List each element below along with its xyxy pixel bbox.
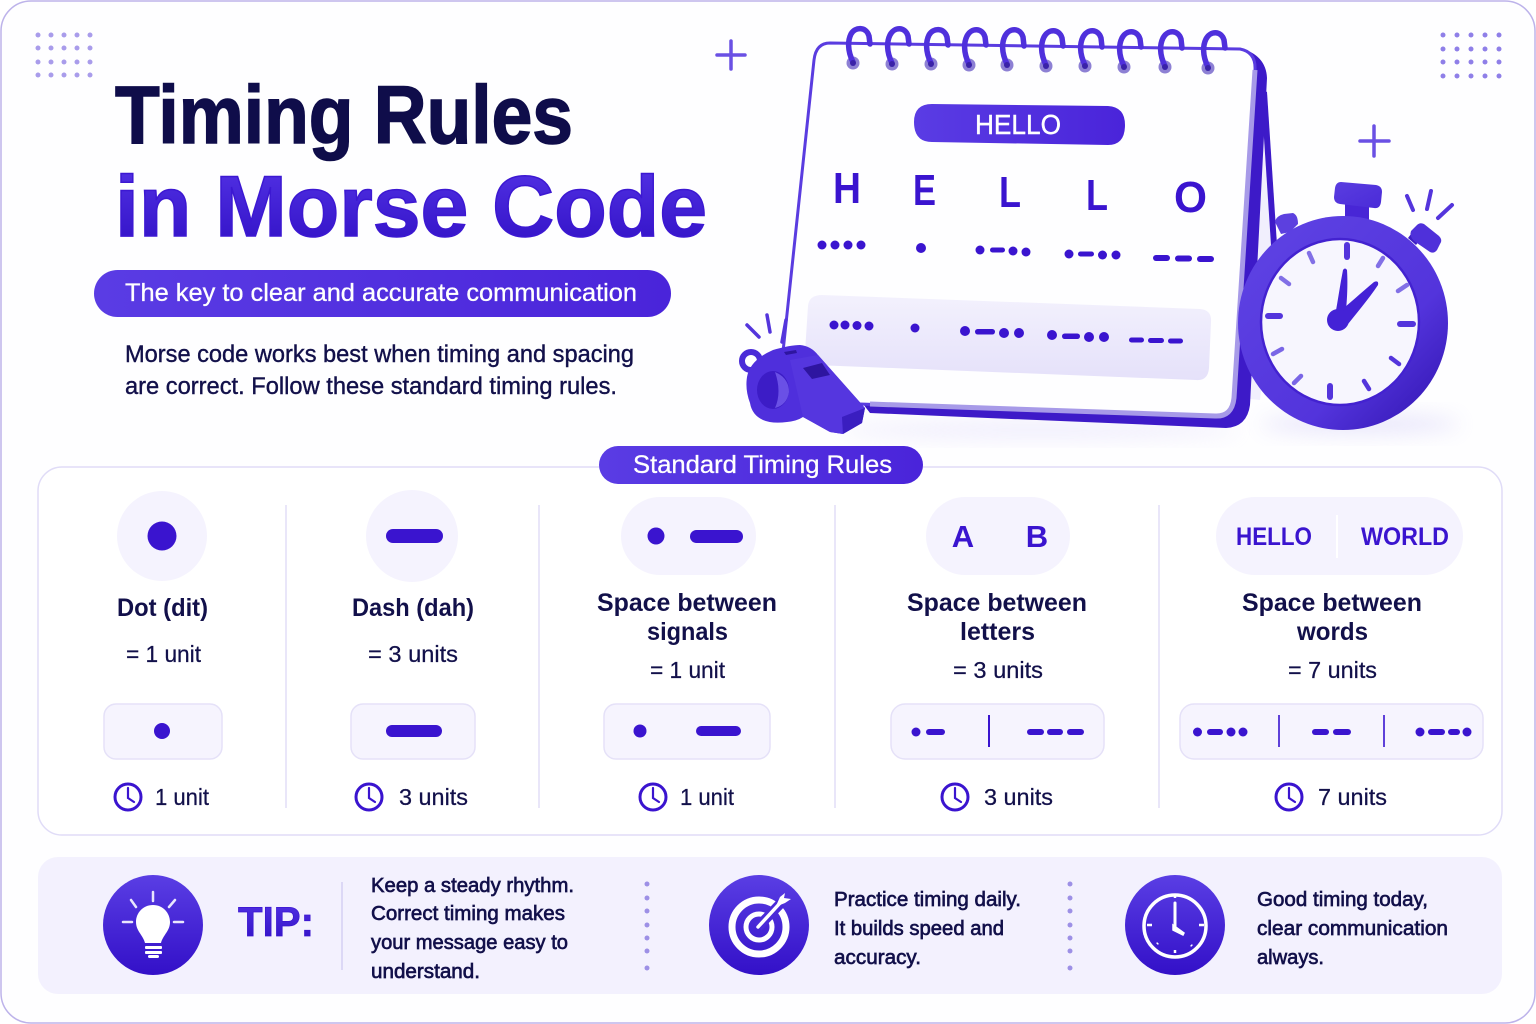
- heading: letters: letters: [960, 618, 1035, 646]
- description text: are correct. Follow these standard timing rules.: [125, 373, 617, 400]
- calendar ring holes: [846, 56, 1214, 74]
- panel heading pill: [599, 446, 923, 484]
- symbol: words: WORLD: [1361, 523, 1449, 551]
- letter H and morse: H: [833, 164, 861, 213]
- column: dot: [104, 491, 222, 810]
- title: Timing Rules: [115, 70, 573, 161]
- whistle body: [746, 345, 865, 434]
- calendar back edge: [860, 48, 1267, 428]
- column: dash: [351, 490, 475, 810]
- heading: signals: Space between: [597, 589, 777, 617]
- description text: Morse code works best when timing and spacing: [125, 341, 634, 368]
- example: words: [1180, 704, 1483, 759]
- duration: words: [1276, 784, 1387, 810]
- heading: letters: Space between: [907, 589, 1087, 617]
- main panel: [38, 467, 1502, 835]
- example: dot: [104, 704, 222, 759]
- duration: letters: [942, 784, 1053, 810]
- tip text: Keep a steady rhythm.: [371, 874, 574, 897]
- closing text: always.: [1257, 946, 1324, 969]
- column: space between signals: [597, 497, 777, 810]
- stopwatch motion marks: [1407, 191, 1452, 218]
- duration: signals: [640, 784, 734, 810]
- heading: words: [1242, 589, 1422, 646]
- heading: letters: [907, 589, 1087, 646]
- tip text: your message easy to: [371, 931, 568, 954]
- practice text: It builds speed and: [834, 917, 1004, 940]
- calendar shadow: [840, 422, 1240, 438]
- subtitle pill: [94, 270, 671, 317]
- closing text: Good timing today,: [1257, 888, 1428, 911]
- closing text: clear communication: [1257, 917, 1448, 940]
- duration: dash: [356, 784, 468, 810]
- practice text: accuracy.: [834, 946, 921, 969]
- letter E and morse: [913, 166, 936, 253]
- value: dash: = 3 units: [368, 641, 458, 667]
- letter L and morse: L: [999, 168, 1021, 217]
- heading: words: Space between: [1242, 589, 1422, 617]
- closing text: [1257, 888, 1448, 969]
- calendar rings: [849, 29, 1225, 67]
- symbol: dash: [366, 490, 458, 582]
- decorative dot grid: top left: [36, 32, 92, 78]
- example: signals: [604, 704, 770, 759]
- letter O and morse: [1153, 173, 1214, 262]
- tip text: [371, 874, 574, 983]
- stopwatch face: [1261, 239, 1419, 405]
- subtitle pill: The key to clear and accurate communication: [125, 279, 637, 307]
- duration: letters: 3 units: [984, 784, 1053, 810]
- symbol: signals: [621, 497, 756, 575]
- symbol: letters: B: [1026, 519, 1048, 554]
- heading: dash: Dash (dah): [352, 594, 474, 622]
- letter L and morse: L: [1086, 171, 1108, 220]
- icon: light bulb: [103, 875, 203, 975]
- duration: dot: 1 unit: [155, 784, 209, 810]
- whistle ring: [742, 352, 760, 370]
- symbol: words: HELLO: [1236, 523, 1312, 551]
- stopwatch ticks: [1268, 245, 1413, 397]
- stopwatch side buttons: [1275, 213, 1298, 234]
- decorative dot grid: top right: [1440, 32, 1502, 78]
- description text: [125, 341, 634, 400]
- value: dot: = 1 unit: [126, 641, 201, 667]
- symbol: letters: [926, 497, 1070, 575]
- column: space between letters: [891, 497, 1104, 810]
- whistle mouth: [757, 371, 789, 409]
- tip label: TIP:: [238, 898, 314, 945]
- stopwatch hands: [1327, 268, 1378, 331]
- value: signals: = 1 unit: [650, 657, 725, 683]
- tip text: understand.: [371, 960, 480, 983]
- icon: target: [709, 875, 809, 975]
- icon: clock: [1125, 875, 1225, 975]
- tip band: [38, 857, 1502, 994]
- stopwatch shadow: [1260, 414, 1460, 434]
- HELLO badge: HELLO: [975, 109, 1061, 140]
- example: letters: [891, 704, 1104, 759]
- heading: signals: [597, 589, 777, 646]
- letter H and morse: [818, 164, 866, 250]
- letter E and morse: E: [913, 166, 936, 215]
- illustration: spiral calendar: [780, 29, 1276, 438]
- value: letters: = 3 units: [953, 657, 1043, 683]
- title: [115, 70, 707, 255]
- tip text: Correct timing makes: [371, 902, 565, 925]
- letter L and morse: [1064, 171, 1120, 260]
- calendar sheet: [780, 43, 1255, 416]
- whistle slots: [803, 363, 830, 379]
- icon: plus left: [717, 41, 745, 69]
- title: in Morse Code: [115, 159, 707, 255]
- stopwatch case: [1238, 216, 1448, 430]
- stopwatch crown: [1345, 203, 1369, 223]
- whistle motion marks: [747, 315, 786, 342]
- full message strip: [805, 295, 1211, 380]
- example: dash: [351, 704, 475, 759]
- letter L and morse: [976, 168, 1030, 256]
- heading: dot: Dot (dit): [117, 594, 208, 622]
- symbol: words: [1216, 497, 1463, 575]
- heading: words: words: [1296, 618, 1368, 646]
- value: words: = 7 units: [1288, 657, 1377, 683]
- HELLO badge: [914, 104, 1125, 145]
- panel heading pill: Standard Timing Rules: [633, 451, 892, 479]
- practice text: Practice timing daily.: [834, 888, 1021, 911]
- illustration: stopwatch: [1238, 182, 1460, 434]
- heading: signals: signals: [647, 618, 728, 646]
- column: space between words: [1180, 497, 1483, 810]
- symbol: letters: A: [952, 519, 974, 554]
- calendar stand: [1240, 95, 1276, 400]
- duration: words: 7 units: [1318, 784, 1387, 810]
- duration: dot: [115, 784, 209, 810]
- duration: dash: 3 units: [399, 784, 468, 810]
- illustration: whistle: [742, 315, 865, 434]
- icon: plus right: [1360, 126, 1389, 156]
- letter O and morse: O: [1174, 173, 1207, 222]
- practice text: [834, 888, 1021, 969]
- duration: signals: 1 unit: [680, 784, 734, 810]
- symbol: dot: [117, 491, 207, 581]
